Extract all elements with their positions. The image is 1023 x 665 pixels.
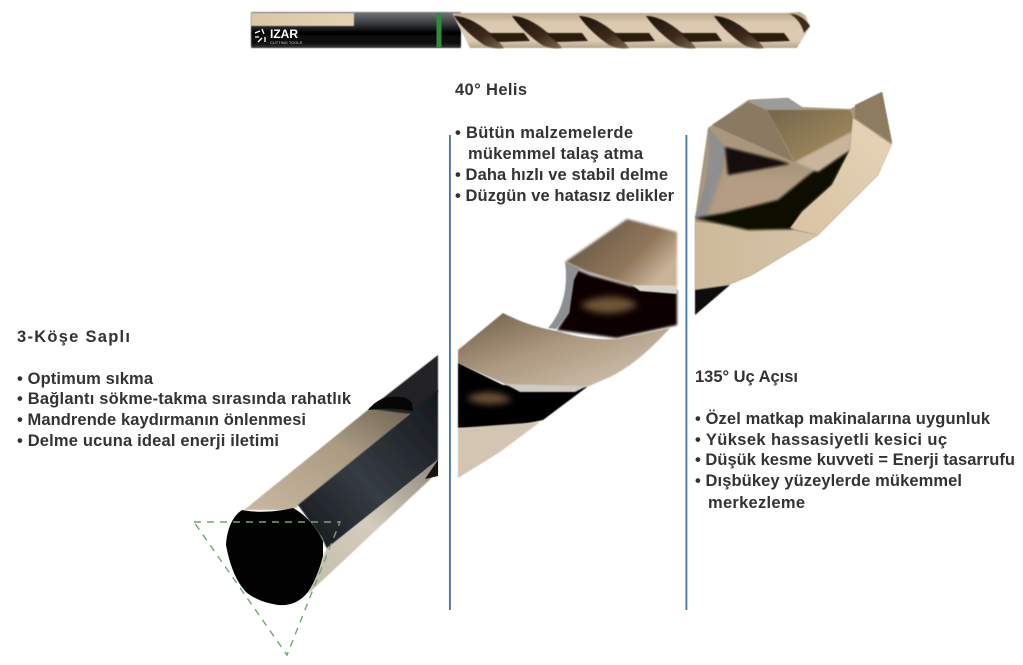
- list: tip benefits: • Özel matkap makinalarına uygunluk: [695, 409, 991, 428]
- list: tip benefits: [695, 409, 1015, 512]
- list: helix benefits: • Bütün malzemelerde: [455, 124, 633, 142]
- tip: right land: [790, 118, 892, 235]
- list: tip benefits: merkezleme: [708, 494, 805, 512]
- tip: secondary face: [795, 132, 852, 172]
- silver edge: [548, 262, 580, 329]
- shank: dark facet: [298, 390, 438, 549]
- divider lines: [449, 135, 687, 610]
- text block: 135° Uç Açısı: [695, 368, 1015, 512]
- shank: dark upper band: [369, 355, 438, 414]
- shank close-up: [194, 355, 438, 655]
- green band: [436, 13, 442, 48]
- shank: upper tan facet: [244, 409, 412, 510]
- heading: 3-Köşe Saplı: 3-Köşe Saplı: [17, 328, 130, 346]
- tip: base silhouette: [695, 92, 892, 290]
- lower flute: [458, 363, 587, 428]
- lower land: [458, 422, 540, 478]
- list: tip benefits: • Düşük kesme kuvveti = Enerji tasarrufu: [695, 451, 1015, 469]
- shank: lower tan facet: [308, 460, 438, 594]
- middle land: [458, 313, 670, 387]
- list: shank benefits: • Optimum sıkma: [17, 370, 154, 388]
- IZAR logo: [255, 27, 303, 45]
- text block: 40° Helis: [455, 81, 675, 205]
- tip: dark flute: [695, 150, 850, 230]
- upper land: [565, 219, 677, 287]
- tip: chisel face: [767, 110, 853, 162]
- list: tip benefits: • Dışbükey yüzeylerde mükemmel: [695, 472, 962, 490]
- list: helix benefits: mükemmel talaş atma: [468, 145, 644, 163]
- tip: point facet: [855, 92, 892, 143]
- text block: 3-Köşe Saplı: [17, 328, 352, 450]
- green dashed triangle: [194, 522, 340, 655]
- tip: left relief: [712, 102, 794, 162]
- tip: dark patch: [725, 147, 790, 175]
- upper flute: [557, 268, 677, 338]
- list: shank benefits: • Bağlantı sökme-takma sırasında rahatlık: [17, 390, 352, 408]
- list: shank benefits: • Delme ucuna ideal enerji iletimi: [17, 432, 279, 450]
- helix close-up: [458, 219, 677, 478]
- heading: 135° Uç Açısı: 135° Uç Açısı: [695, 368, 798, 386]
- shank: end face: [226, 508, 323, 605]
- product drill photo: [251, 12, 810, 48]
- tip: bottom dark: [695, 285, 730, 315]
- IZAR logo: IZAR: [270, 27, 298, 41]
- tip: silver flute wall: [695, 128, 725, 218]
- list: shank benefits: [17, 370, 352, 450]
- heading: 40° Helis: 40° Helis: [455, 81, 527, 99]
- IZAR logo: CUTTING TOOLS: [270, 40, 303, 45]
- list: shank benefits: • Mandrende kaydırmanın önlenmesi: [17, 411, 306, 429]
- list: helix benefits: [455, 124, 675, 205]
- list: helix benefits: • Daha hızlı ve stabil delme: [455, 166, 668, 184]
- list: helix benefits: • Düzgün ve hatasız delikler: [455, 187, 675, 205]
- tip: inner flute light: [708, 175, 805, 216]
- tip close-up: [695, 92, 892, 315]
- tip: lower land: [695, 222, 818, 290]
- list: tip benefits: • Yüksek hassasiyetli kesici uç: [695, 431, 947, 449]
- tip: top silver: [748, 98, 802, 110]
